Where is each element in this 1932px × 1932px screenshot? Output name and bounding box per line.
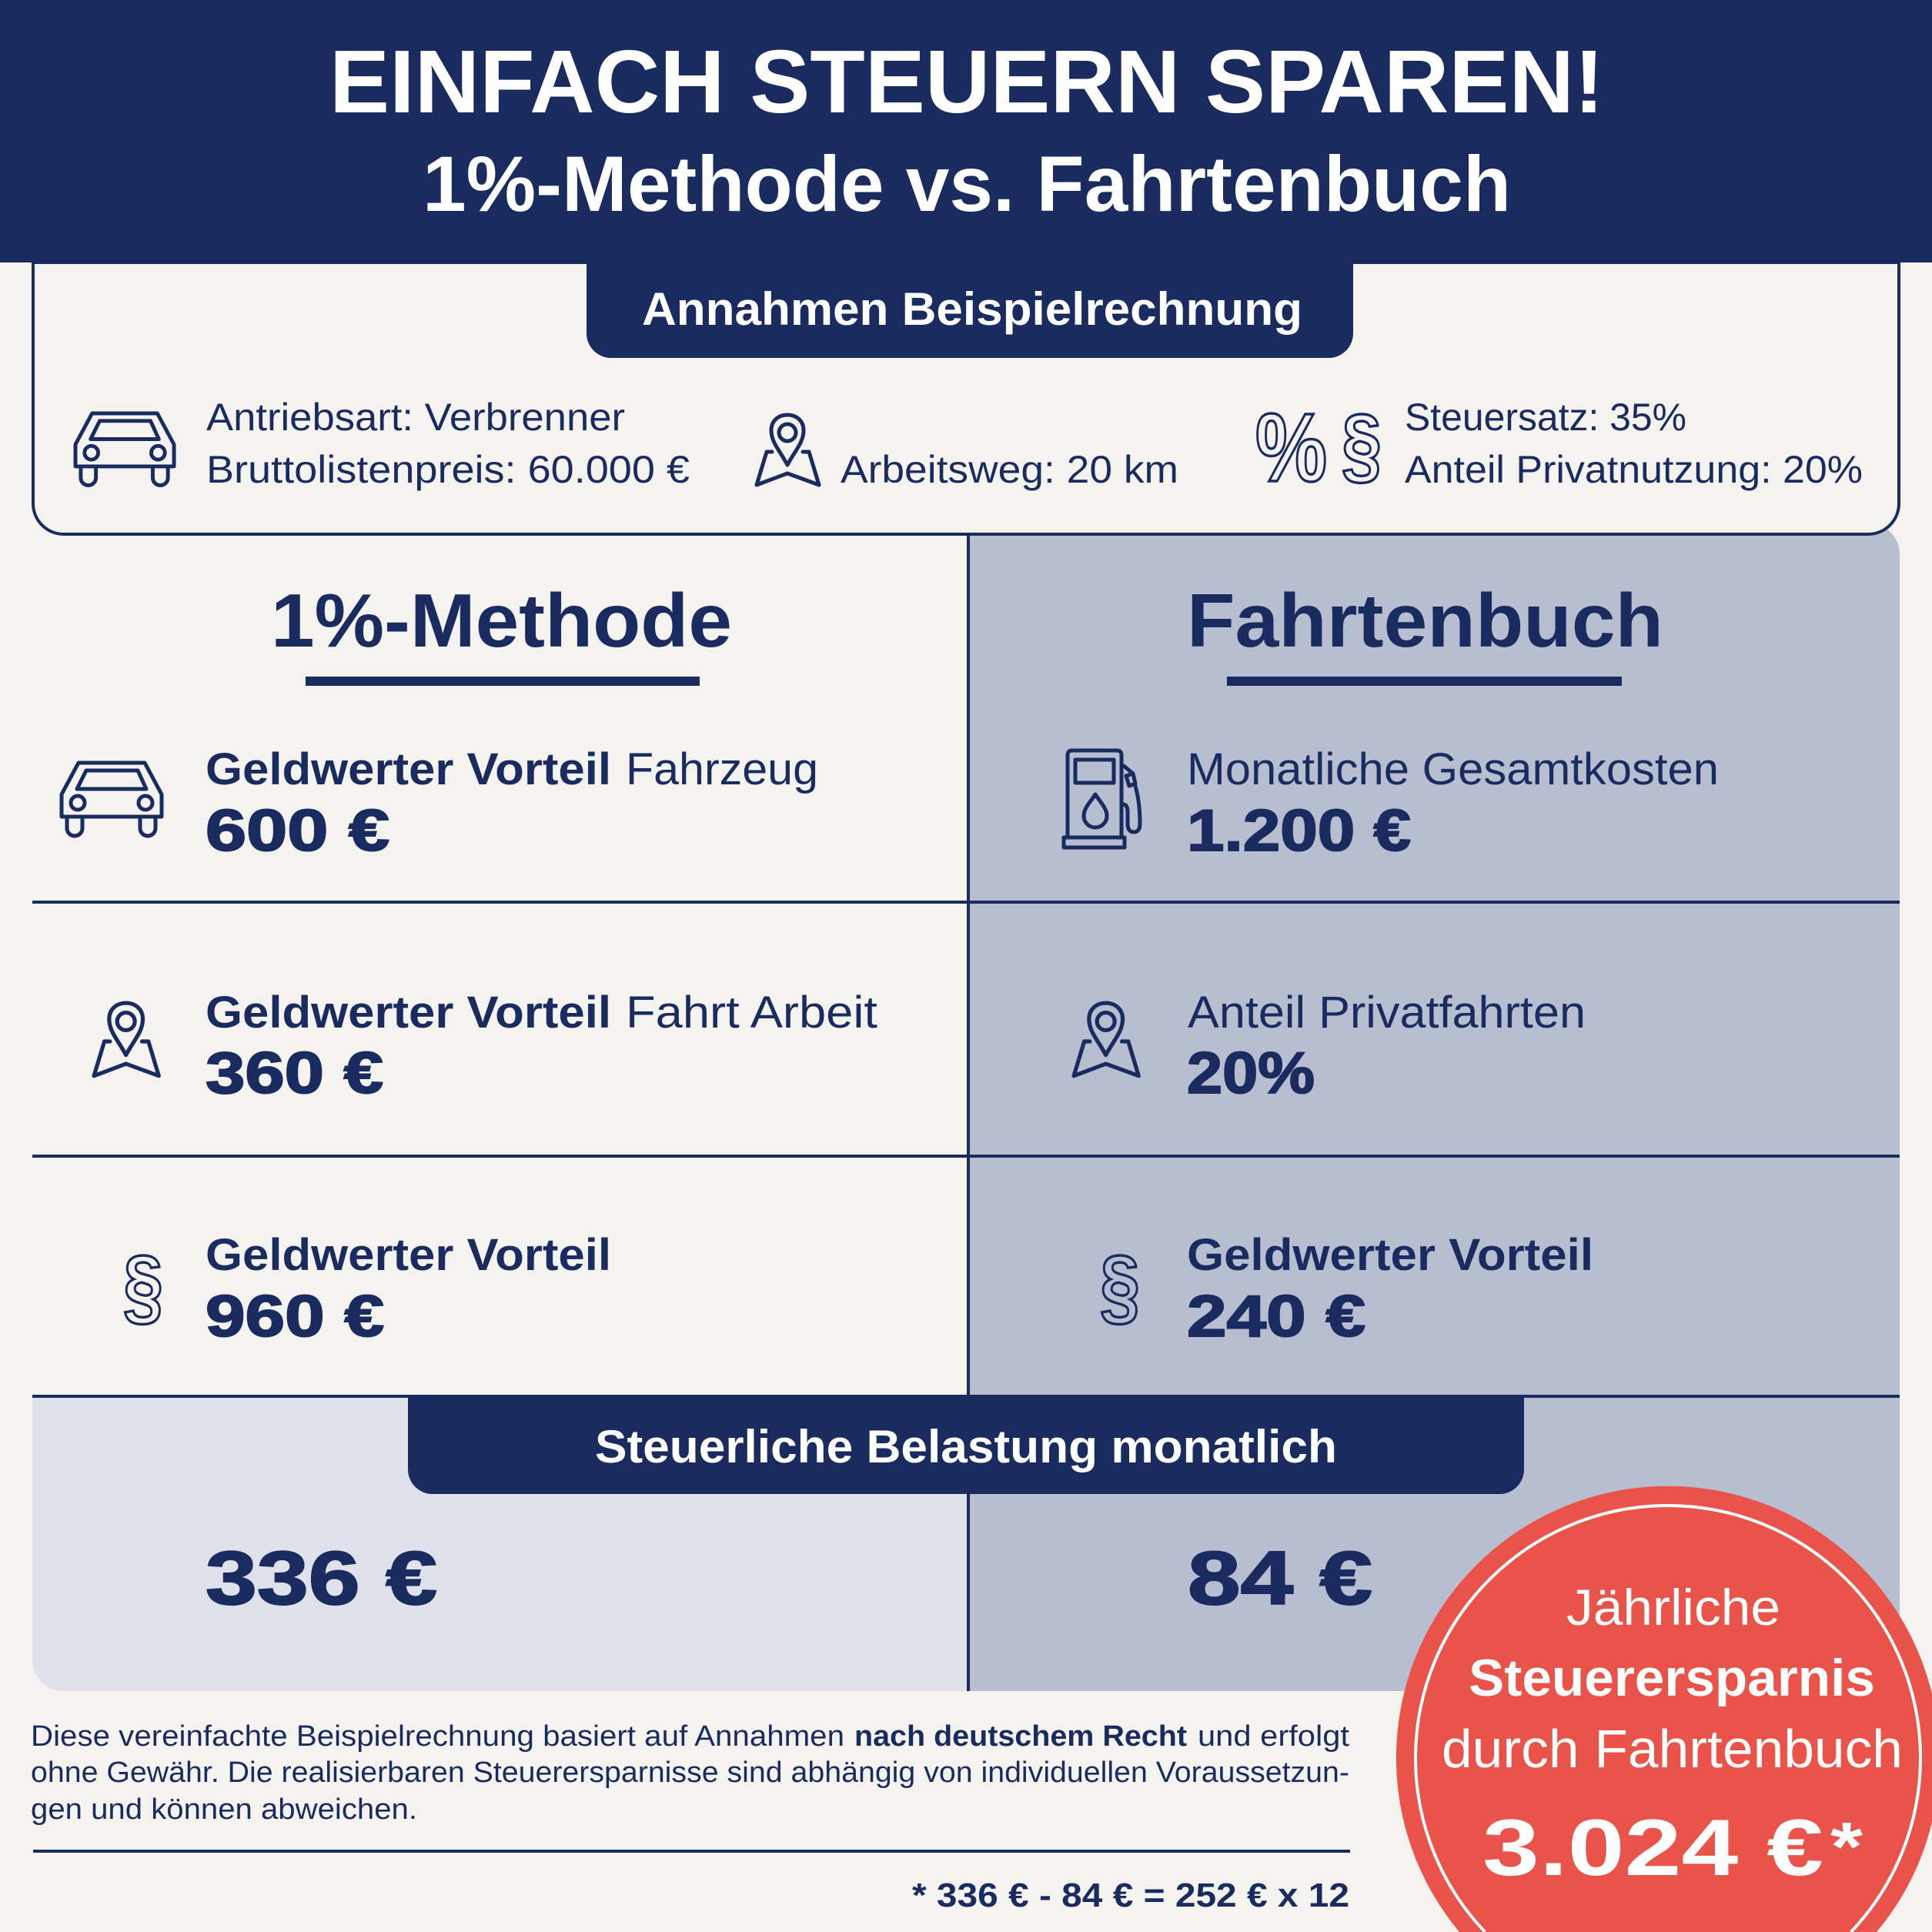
icon: paragraph: § [1100,1238,1140,1333]
assumption: tax rate and private use [1405,396,1863,491]
row 3 left: total benefit: 960 € [206,1284,384,1349]
subtitle: 1%-Methode vs. Fahrtenbuch [423,140,1511,228]
assumptions heading badge: Annahmen Beispielrechnung [642,283,1302,335]
assumption: commute: Arbeitsweg: 20 km [841,448,1178,491]
assumption: drive type and list price: Bruttolistenpreis: 60.000 € [206,448,690,491]
icon: map pin [1074,1003,1138,1076]
callout: annual tax saving [1396,1486,1932,1932]
callout: annual tax saving: durch Fahrtenbuch [1442,1719,1903,1779]
assumptions heading badge [587,262,1353,358]
row 1 left: vehicle benefit: Geldwerter Vorteil [206,744,611,794]
row 2 right: private trip share: Anteil Privatfahrten [1188,988,1586,1038]
row 2 right: private trip share: 20% [1187,1041,1315,1106]
footnote: disclaimer: gen und können abweichen. [31,1793,417,1826]
icon: paragraph: § [123,1238,163,1333]
row 1 right: monthly total cost [1064,744,1719,864]
row 3 right: total benefit: 240 € [1187,1284,1365,1349]
footnote: disclaimer: nach deutschem Recht [854,1720,1187,1753]
row 1 left: vehicle benefit [62,744,818,864]
column heading: Fahrtenbuch: Fahrtenbuch [1187,578,1663,663]
callout: annual tax saving: Jährliche [1566,1579,1780,1636]
row 1 left: vehicle benefit: Fahrzeug [626,744,818,794]
header banner [0,0,1932,262]
title: EINFACH STEUERN SPAREN! [329,32,1604,132]
icon: percent and paragraph: § [1342,397,1382,492]
icon: fuel pump [1064,750,1140,847]
table grid lines [32,534,1900,1691]
result: 1%-Methode amount: 336 € [206,1536,437,1620]
footnote: disclaimer: ohne Gewähr. Die realisierbaren Steuerersparnisse sind abhängig von individuellen Voraussetzun- [31,1757,1349,1789]
assumption: drive type and list price [206,396,690,491]
assumption: tax rate and private use: Steuersatz: 35% [1405,396,1686,439]
icon: car [62,763,162,836]
result banner: monthly tax burden [408,1396,1524,1494]
row 2 right: private trip share [1074,988,1586,1106]
row 3 left: total benefit [123,1230,611,1349]
assumption: tax rate and private use: Anteil Privatnutzung: 20% [1405,448,1863,491]
result: Fahrtenbuch amount: 84 € [1188,1536,1372,1620]
row 2 left: commute benefit: 360 € [206,1041,383,1106]
column heading: 1%-Methode: 1%-Methode [271,578,732,663]
footnote rule [33,1850,1350,1853]
icon: percent and paragraph: % [1255,393,1327,502]
callout: annual tax saving: Steuerersparnis [1469,1649,1875,1707]
row 3 left: total benefit: Geldwerter Vorteil [206,1230,611,1280]
callout: annual tax saving: 3.024 € [1482,1803,1823,1893]
row 2 left: commute benefit: Geldwerter Vorteil [206,988,611,1038]
icon: percent and paragraph [1255,393,1382,502]
assumption: drive type and list price: Antriebsart: Verbrenner [206,396,625,439]
callout: annual tax saving: * [1830,1809,1863,1886]
result banner: monthly tax burden: Steuerliche Belastung monatlich [595,1421,1337,1472]
panel: assumptions [33,262,1899,534]
footnote: disclaimer: Diese vereinfachte Beispielrechnung basiert auf Annahmen [31,1720,844,1753]
footnote: calculation: * 336 € - 84 € = 252 € x 12 [912,1877,1349,1914]
row 1 left: vehicle benefit: 600 € [206,798,389,864]
footnote: disclaimer [31,1720,1349,1826]
icon: map pin [94,1003,159,1076]
row 2 left: commute benefit [94,988,877,1106]
row 3 right: total benefit: Geldwerter Vorteil [1187,1230,1593,1280]
row 2 left: commute benefit: Fahrt Arbeit [626,988,877,1038]
icon: map pin [757,415,819,485]
panel: 1%-Methode result background [32,1396,968,1691]
icon: car [75,413,174,486]
panel: Fahrtenbuch column background [968,523,1900,1691]
row 3 right: total benefit [1100,1230,1593,1349]
row 1 right: monthly total cost: Monatliche Gesamtkosten [1187,744,1719,794]
row 1 right: monthly total cost: 1.200 € [1187,798,1411,864]
footnote: disclaimer: und erfolgt [1198,1720,1349,1753]
